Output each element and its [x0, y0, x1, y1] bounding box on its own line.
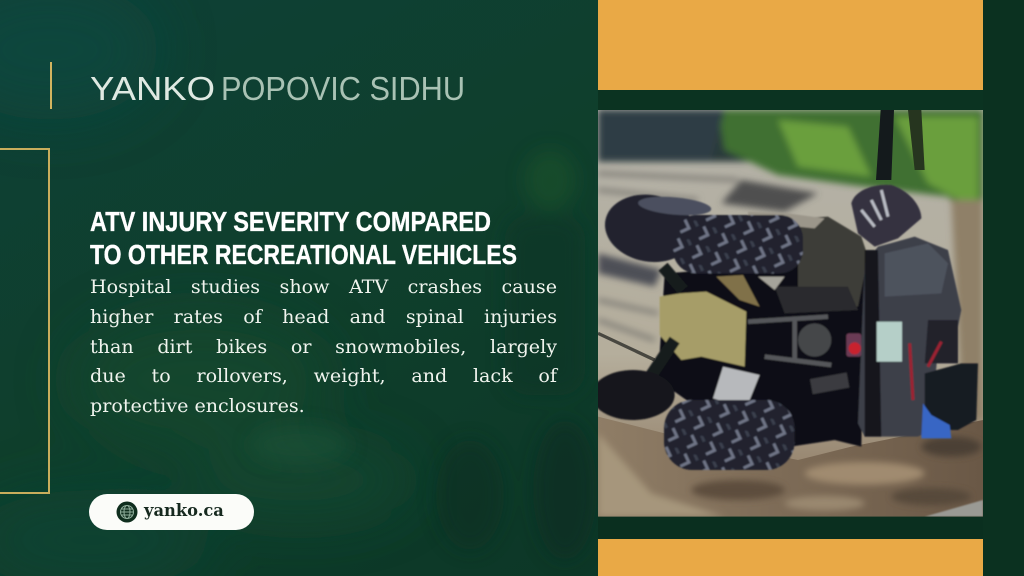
gold divider beside logo [50, 62, 52, 109]
text: due to rollovers, weight, and lack of [90, 364, 557, 387]
photo edge mask [983, 110, 984, 517]
blue bag [921, 403, 951, 438]
logo wordmark: POPOVIC SIDHU [221, 70, 465, 107]
text: Hospital studies show ATV crashes cause [90, 275, 557, 298]
wheel: top tire [673, 215, 803, 273]
straps [910, 342, 941, 400]
tail light [846, 333, 861, 357]
wheel: bottom tire [664, 400, 795, 470]
gold outline frame [0, 149, 49, 493]
icon: globe [116, 502, 138, 522]
skid plates [660, 292, 746, 367]
wheel: rear left [604, 194, 690, 264]
heading: TO OTHER RECREATIONAL VEHICLES [90, 239, 517, 270]
frame tubes [748, 317, 831, 365]
text: than dirt bikes or snowmobiles, largely [90, 335, 557, 358]
helmet [851, 185, 921, 247]
wheel: lower left [591, 370, 675, 420]
ground sand [598, 417, 983, 517]
website address: yanko.ca [144, 501, 224, 520]
heading: ATV INJURY SEVERITY COMPARED [90, 206, 491, 237]
body text [90, 275, 558, 417]
ATV body [591, 185, 978, 470]
logo wordmark [90, 70, 465, 107]
photo: overturned ATV on a sandy trail [591, 110, 983, 517]
license plate [877, 322, 902, 362]
tree trunk [876, 110, 894, 180]
text: protective enclosures. [90, 394, 305, 417]
accent bar: bottom orange [598, 539, 983, 576]
heading [90, 206, 517, 270]
text: higher rates of head and spinal injuries [90, 305, 557, 328]
accent bar: top orange [598, 0, 983, 90]
logo wordmark: YANKO [90, 70, 215, 107]
website pill [89, 494, 254, 530]
